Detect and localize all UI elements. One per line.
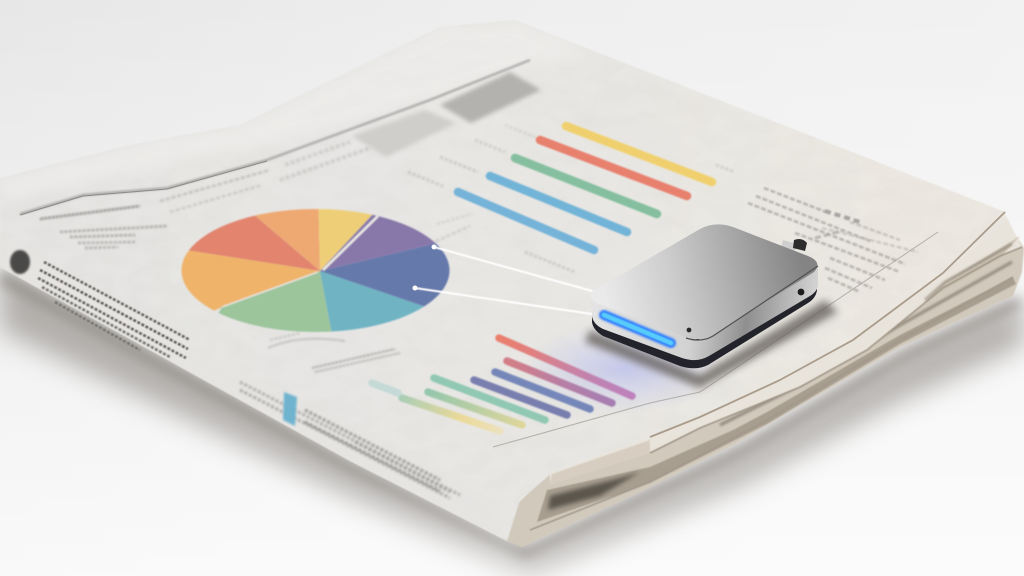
newspaper cast shadow xyxy=(0,268,1024,572)
beam: upper xyxy=(432,244,592,291)
device shadow xyxy=(585,300,838,388)
wedge: orange xyxy=(254,208,321,272)
wedge: purple xyxy=(320,214,436,272)
newspaper page stack xyxy=(500,214,1024,547)
bar: yellow xyxy=(566,126,712,182)
photo block: light grey xyxy=(352,110,456,157)
light beams from pie to device xyxy=(412,244,592,314)
spine accent: blue tag xyxy=(283,392,297,426)
device connector xyxy=(781,239,807,252)
fold gap xyxy=(537,277,1016,522)
pie chart xyxy=(180,208,450,333)
wedge: amber xyxy=(180,250,320,312)
device top face xyxy=(590,224,817,339)
device LED strip xyxy=(604,315,671,343)
gap: yellow to purple xyxy=(323,216,378,270)
bottom bar chart xyxy=(372,338,632,431)
bar: pale teal xyxy=(372,383,398,393)
device side wall xyxy=(591,265,818,360)
device base xyxy=(592,284,817,368)
bar: blue xyxy=(490,176,627,232)
bar: teal xyxy=(434,378,545,420)
wedge: green xyxy=(218,270,332,333)
device indicator hole xyxy=(687,328,691,332)
top bar chart xyxy=(458,126,712,250)
bar: coral to pink xyxy=(499,338,632,396)
device xyxy=(590,224,818,368)
beam: lower xyxy=(412,286,592,314)
spine text column: left xyxy=(38,262,190,358)
wedge: teal xyxy=(320,270,424,332)
headline and article text xyxy=(40,125,735,372)
stack base xyxy=(500,220,1024,547)
gap: amber to green xyxy=(222,272,318,307)
blue light cast on paper xyxy=(525,323,725,413)
bar: pale yellow xyxy=(402,398,500,431)
bar: light blue xyxy=(458,192,594,250)
bar: green xyxy=(515,158,657,214)
spine text column: lower xyxy=(240,382,460,498)
bar: slate blue xyxy=(474,380,567,415)
wedge: yellow xyxy=(318,208,372,271)
bar: rose to violet xyxy=(507,361,612,403)
photo block: dark grey xyxy=(440,72,541,123)
wedge: red xyxy=(188,214,320,272)
table of figures xyxy=(748,188,918,292)
bar: red xyxy=(540,140,687,196)
second sheet xyxy=(550,214,1022,484)
device audio jack xyxy=(798,289,804,295)
wedge: blue xyxy=(320,242,450,307)
bar: indigo xyxy=(495,372,590,409)
spine icon: dark circle xyxy=(10,250,30,274)
bar: green to yellow xyxy=(428,392,522,425)
